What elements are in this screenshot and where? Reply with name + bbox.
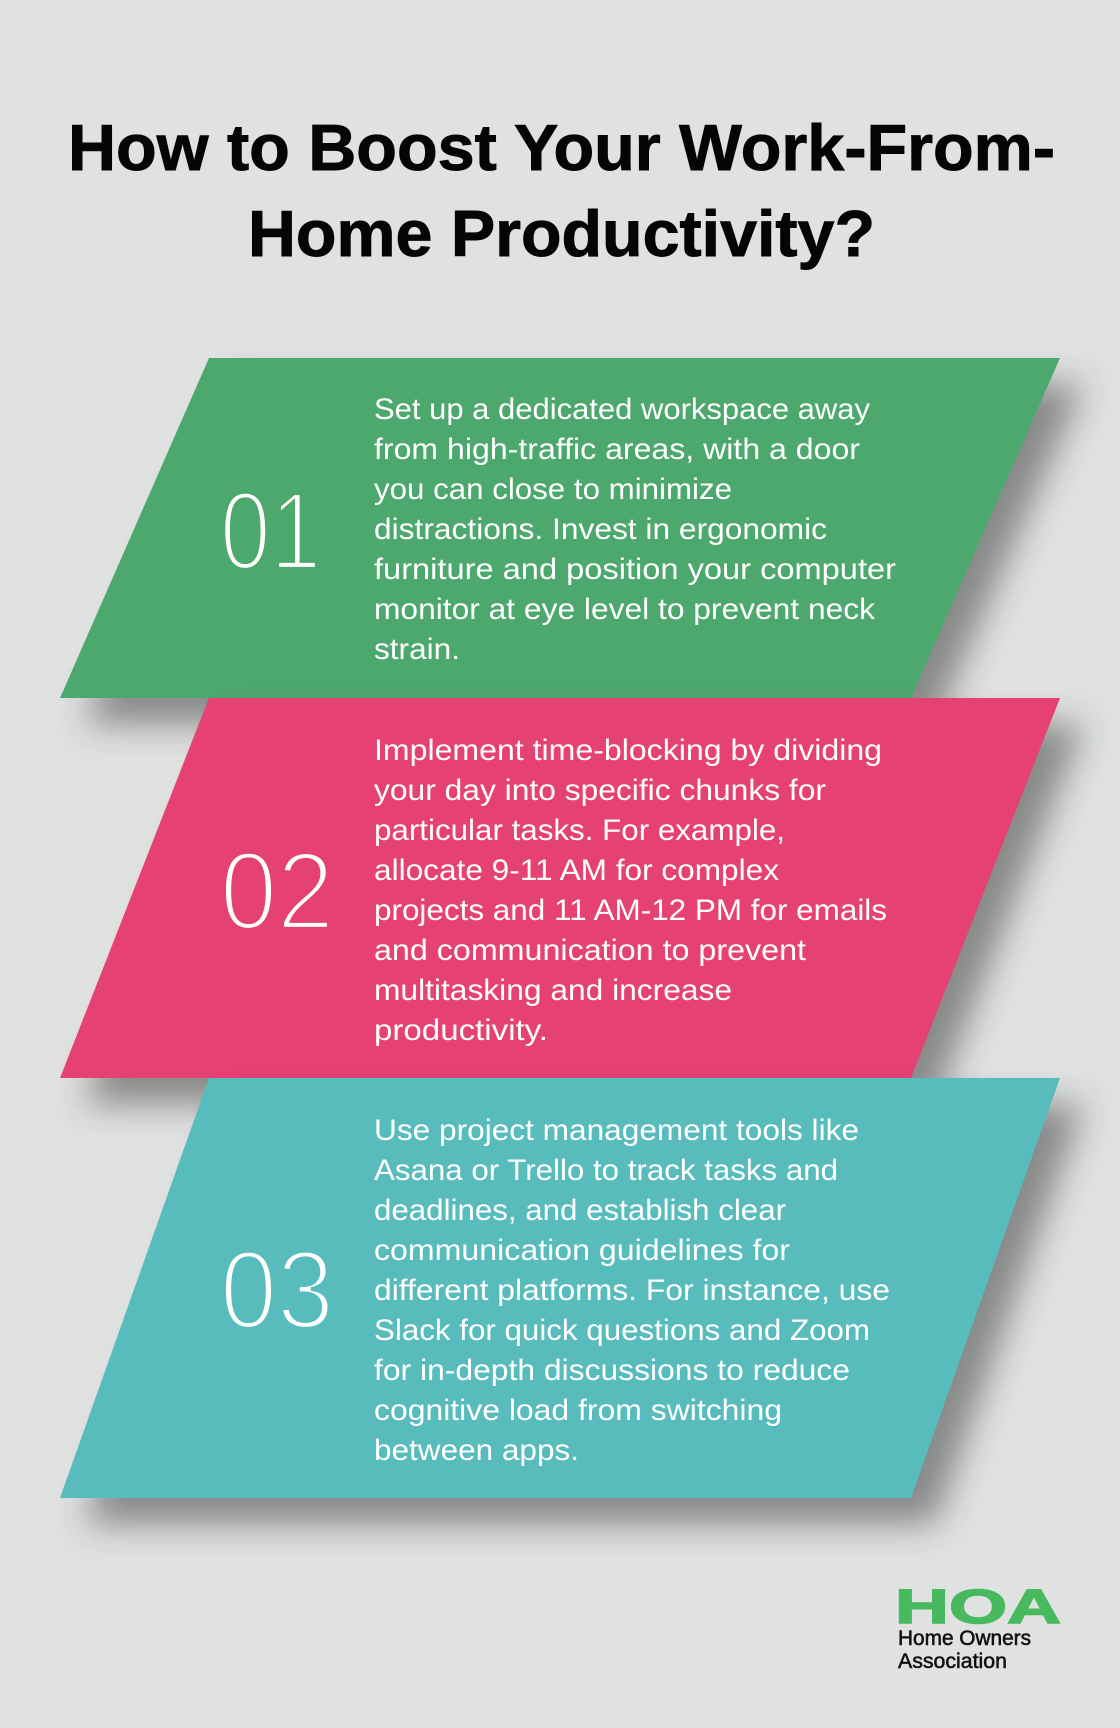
text block 2: productivity. <box>374 1014 548 1047</box>
text block 1: strain. <box>374 633 460 666</box>
text block 1: monitor at eye level to prevent neck <box>374 593 876 626</box>
text block 1: you can close to minimize <box>374 473 732 506</box>
logo mark HOA: HOA <box>895 1581 1061 1634</box>
text block 3: between apps. <box>374 1434 579 1467</box>
text block 1: Set up a dedicated workspace away <box>374 393 870 426</box>
title <box>68 111 1055 270</box>
number 03: 03 <box>220 1229 334 1352</box>
title: How to Boost Your Work-From- <box>68 111 1055 184</box>
text block 2: projects and 11 AM-12 PM for emails <box>374 894 887 927</box>
logo wordmark: Association <box>898 1650 1007 1673</box>
number 01: 01 <box>220 470 321 593</box>
logo wordmark: Home Owners <box>898 1627 1031 1650</box>
text block 3: cognitive load from switching <box>374 1394 782 1427</box>
text block 2: your day into specific chunks for <box>374 774 826 807</box>
text block 1: from high-traffic areas, with a door <box>374 433 860 466</box>
text block 2: Implement time-blocking by dividing <box>374 734 882 767</box>
text block 3: Use project management tools like <box>374 1114 859 1147</box>
text block 3: deadlines, and establish clear <box>374 1194 786 1227</box>
text block 1: distractions. Invest in ergonomic <box>374 513 827 546</box>
text block 3 <box>374 1114 890 1467</box>
text block 3: Slack for quick questions and Zoom <box>374 1314 870 1347</box>
text block 1: furniture and position your computer <box>374 553 896 586</box>
panel: step 2 <box>60 698 1084 1104</box>
number 02: 02 <box>220 830 334 953</box>
text block 3: Asana or Trello to track tasks and <box>374 1154 838 1187</box>
text block 3: communication guidelines for <box>374 1234 790 1267</box>
text block 2: multitasking and increase <box>374 974 732 1007</box>
text block 2: particular tasks. For example, <box>374 814 785 847</box>
text block 2 <box>374 734 887 1047</box>
logo wordmark <box>898 1627 1031 1673</box>
panel: step 3 <box>60 1078 1084 1524</box>
logo <box>895 1581 1061 1673</box>
text block 2: allocate 9-11 AM for complex <box>374 854 779 887</box>
text block 3: different platforms. For instance, use <box>374 1274 890 1307</box>
text block 2: and communication to prevent <box>374 934 807 967</box>
text block 1 <box>374 393 896 666</box>
panel: step 1 <box>60 358 1084 724</box>
text block 3: for in-depth discussions to reduce <box>374 1354 850 1387</box>
title: Home Productivity? <box>248 197 875 270</box>
